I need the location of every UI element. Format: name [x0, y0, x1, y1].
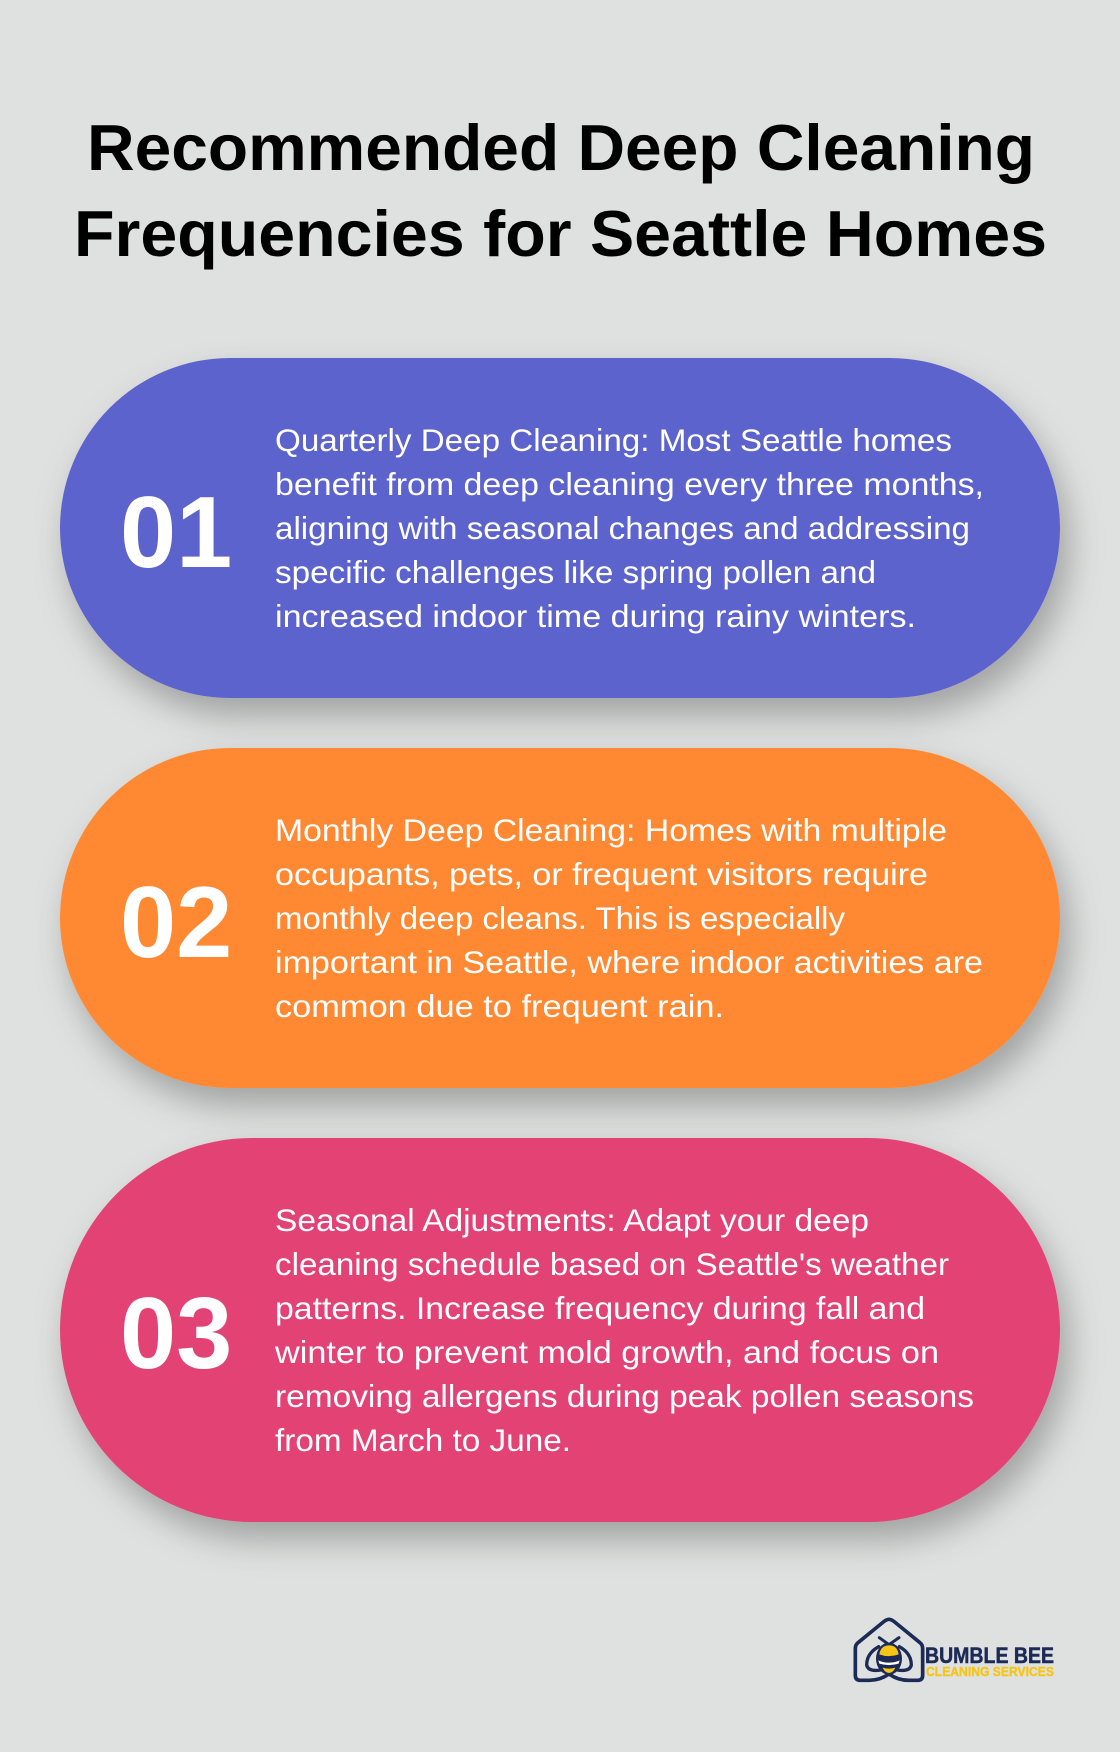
text block: seasonal	[274, 1202, 974, 1458]
text block: seasonal: patterns. Increase frequency during fall and	[275, 1290, 925, 1326]
text block: quarterly: aligning with seasonal changes and addressing	[275, 510, 970, 546]
text block: seasonal: cleaning schedule based on Seattle's weather	[275, 1246, 949, 1282]
pill background: blue	[60, 358, 1060, 698]
title: Frequencies for Seattle Homes	[74, 197, 1047, 270]
text block: quarterly: increased indoor time during rainy winters.	[275, 598, 916, 634]
logo: Bumble Bee Cleaning Services	[855, 1619, 1054, 1680]
number 03: 03	[120, 1278, 232, 1390]
text block: seasonal: from March to June.	[275, 1422, 571, 1458]
text block: seasonal: winter to prevent mold growth, and focus on	[274, 1334, 939, 1370]
number 02: 02	[120, 867, 232, 979]
panel: monthly deep cleaning	[60, 748, 1060, 1088]
text block: monthly	[275, 812, 983, 1024]
text block: quarterly: Quarterly Deep Cleaning: Most Seattle homes	[275, 422, 952, 458]
logo wordmark: BUMBLE BEE	[925, 1643, 1054, 1668]
text block: monthly: Monthly Deep Cleaning: Homes with multiple	[275, 812, 947, 848]
text block: quarterly: benefit from deep cleaning every three months,	[275, 466, 984, 502]
text block: monthly: important in Seattle, where indoor activities are	[275, 944, 983, 980]
panel: seasonal adjustments	[60, 1138, 1060, 1522]
title	[74, 111, 1047, 270]
text block: quarterly	[275, 422, 984, 634]
text block: monthly: monthly deep cleans. This is especially	[275, 900, 845, 936]
logo tagline: CLEANING SERVICES	[926, 1664, 1054, 1679]
text block: monthly: common due to frequent rain.	[275, 988, 724, 1024]
pill background: pink	[60, 1138, 1060, 1522]
pill background: orange	[60, 748, 1060, 1088]
text block: quarterly: specific challenges like spring pollen and	[275, 554, 876, 590]
text block: seasonal: removing allergens during peak pollen seasons	[275, 1378, 974, 1414]
title: Recommended Deep Cleaning	[87, 111, 1035, 184]
icon: bee in house	[855, 1619, 923, 1680]
text block: seasonal: Seasonal Adjustments: Adapt your deep	[275, 1202, 869, 1238]
panel: quarterly deep cleaning	[60, 358, 1060, 698]
text block: monthly: occupants, pets, or frequent visitors require	[275, 856, 928, 892]
number 01: 01	[120, 477, 232, 589]
